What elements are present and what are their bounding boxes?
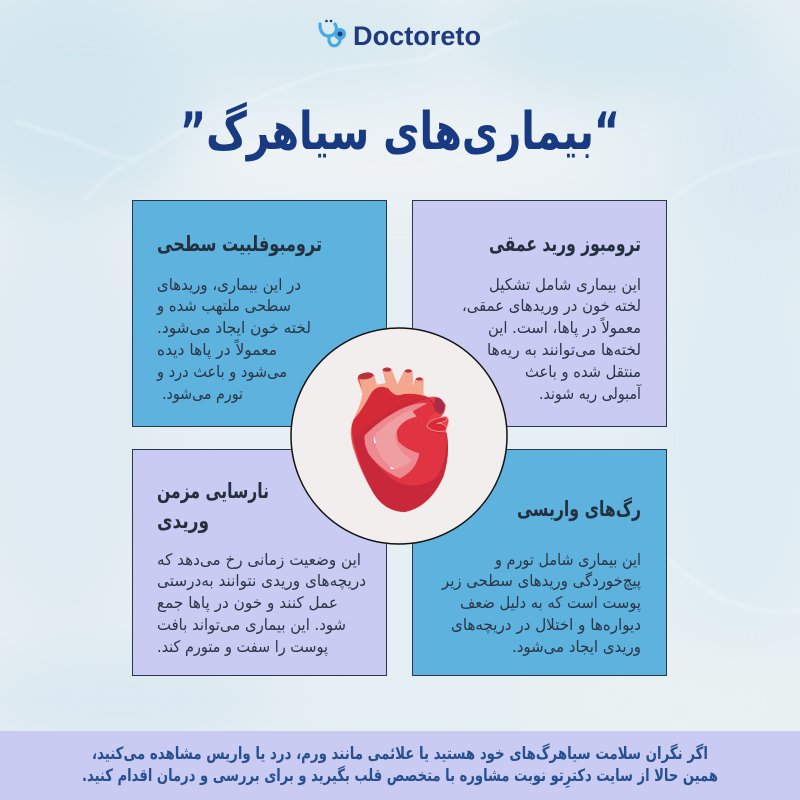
body text: شود. این بیماری می‌تواند بافت <box>157 615 346 635</box>
body text: معمولاً در پاها دیده <box>157 339 277 360</box>
body text: تورم می‌شود. <box>162 384 243 404</box>
body text <box>441 550 641 657</box>
icon: anatomical heart <box>351 367 449 512</box>
body text: دریچه‌های وریدی نتوانند به‌درستی <box>157 571 366 591</box>
logo: Doctoreto <box>320 20 481 51</box>
body text: لخته‌ها می‌توانند به ریه‌ها <box>487 340 641 360</box>
panel: deep vein thrombosis <box>412 200 666 426</box>
body text: لخته خون در وریدهای عمقی، <box>462 296 641 316</box>
heading: ترومبوفلبیت سطحی <box>157 232 322 256</box>
icon: stethoscope <box>320 20 346 46</box>
body text: این بیماری شامل تورم و <box>494 550 641 570</box>
body text: می‌شود و باعث درد و <box>156 362 287 382</box>
heading <box>157 479 269 533</box>
title: “بیماری‌های سیاهرگ” <box>180 101 620 162</box>
body text: وریدی ایجاد می‌شود. <box>512 637 641 657</box>
body text: دیواره‌ها و اختلال در دریچه‌های <box>451 615 641 635</box>
body text: پوست را سفت و متورم کند. <box>157 637 328 657</box>
body text: پیچ‌خوردگی وریدهای سطحی زیر <box>441 571 641 591</box>
body text: منتقل شده و باعث <box>525 362 641 382</box>
footer band <box>0 731 800 800</box>
body text: پوست است که به دلیل ضعف <box>460 593 641 613</box>
heading: وریدی <box>157 509 209 533</box>
call to action text <box>82 743 718 789</box>
panel: varicose veins <box>412 450 666 676</box>
body text <box>157 550 366 657</box>
body text <box>156 275 311 404</box>
body text: لخته خون ایجاد می‌شود. <box>157 318 311 338</box>
panel: superficial thrombophlebitis <box>132 200 386 426</box>
body text: در این بیماری، وریدهای <box>157 275 301 295</box>
body text: این بیماری شامل تشکیل <box>489 275 641 295</box>
body text: آمبولی ریه شوند. <box>539 384 642 404</box>
body text: این وضعیت زمانی رخ می‌دهد که <box>157 550 361 570</box>
center circle <box>291 328 507 544</box>
heading: رگ‌های واریسی <box>517 496 641 521</box>
body text: سطحی ملتهب شده و <box>156 296 291 316</box>
brand name: Doctoreto <box>353 21 481 51</box>
body text: عمل کنند و خون در پاها جمع <box>157 593 338 613</box>
body text <box>462 275 642 404</box>
panel: chronic venous insufficiency <box>132 450 386 676</box>
heading: نارسایی مزمن <box>157 479 269 503</box>
heading: ترومبوز ورید عمقی <box>489 232 641 256</box>
body text: معمولاً در پاها، است. این <box>488 317 641 338</box>
